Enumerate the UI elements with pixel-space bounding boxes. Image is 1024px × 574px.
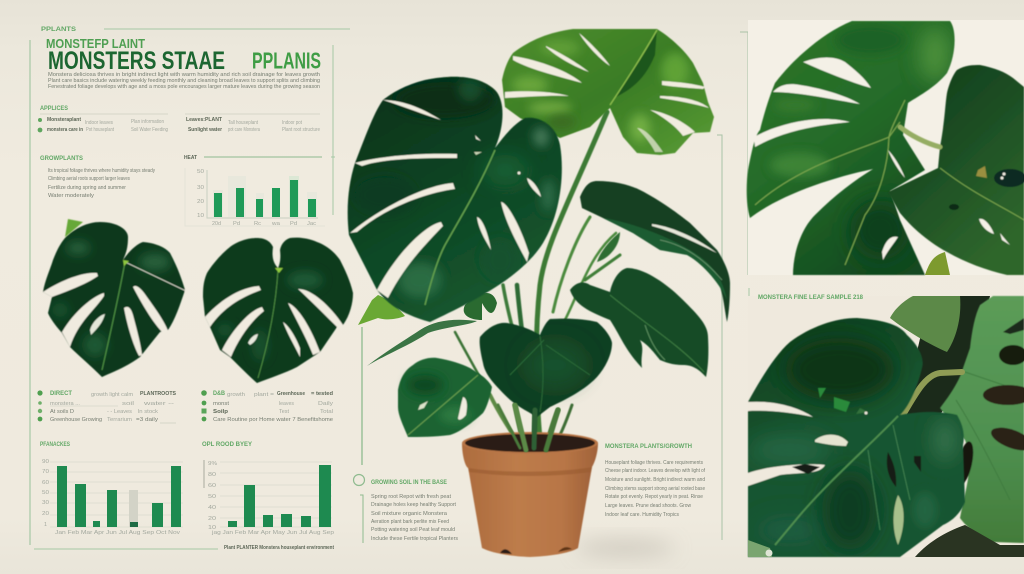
- section: applices: Indoor leaves: [85, 120, 113, 126]
- leaf: narrow lower-left: [367, 320, 477, 366]
- callout right: Rotate pot evenly. Repot yearly in peat. Rinse: [605, 494, 703, 500]
- leaf: lower right: [570, 268, 708, 377]
- plant: stems: [455, 112, 620, 450]
- left lower bar chart: [40, 442, 183, 536]
- left lower bar chart: 90: [42, 459, 49, 465]
- left legend list: [37, 390, 177, 423]
- section: applices: Monsteraplant: [47, 117, 81, 123]
- right lower bar chart: 10: [208, 525, 216, 531]
- pot shadow: [575, 540, 675, 556]
- callout right: [605, 444, 706, 518]
- callout left: Drainage holes keep healthy Support: [371, 502, 457, 508]
- intro paragraph: [48, 72, 320, 90]
- subtitle: MONSTEFP LAINT: [46, 37, 145, 51]
- leaf: lower left: [398, 358, 492, 437]
- title: MONSTERS STAAE: [48, 47, 225, 75]
- leaf: drooping right: [580, 181, 730, 322]
- right legend list: Soilp: [213, 409, 228, 415]
- small bar chart: 50: [197, 169, 204, 175]
- left lower bar chart: 30: [42, 500, 49, 506]
- left legend list: DIRECT: [50, 391, 72, 397]
- intro paragraph: Monstera deliciosa thrives in bright indirect light with warm humidity and rich soil drainage for leaves growth: [48, 72, 320, 78]
- left lower bar chart: PFANACKES: [40, 442, 70, 448]
- back leaf: [890, 296, 960, 352]
- small bar chart: 30: [197, 185, 204, 191]
- leaf: top light green: [502, 29, 714, 155]
- callout right: Large leaves. Prune dead shoots. Grow: [605, 503, 691, 509]
- small bar chart: HEAT: [184, 155, 197, 161]
- dark gap: [905, 296, 990, 415]
- right lower bar chart: 40: [208, 505, 216, 511]
- left legend list: water --: [142, 401, 174, 407]
- frame lines: [30, 29, 905, 549]
- left legend list: monstera ...: [50, 401, 80, 407]
- left legend list: Terrarium: [107, 417, 132, 423]
- left lower bar chart: 20: [42, 511, 49, 517]
- header label: PPLANTS: [41, 27, 76, 33]
- panel label: MONSTERA FINE LEAF SAMPLE 218: [758, 295, 864, 301]
- left lower bar chart: 1: [44, 522, 47, 528]
- section: applices: Plan information: [131, 119, 164, 125]
- small bar chart: 10: [197, 213, 204, 219]
- left lower bar chart: 70: [42, 469, 49, 475]
- small bar chart: [184, 155, 325, 227]
- leaf: central front: [480, 319, 612, 417]
- small bar chart: Pd: [233, 221, 240, 227]
- pot: [462, 432, 598, 557]
- small bar chart: Rc: [254, 221, 261, 227]
- callout left: Include these Fertile tropical Planters: [371, 536, 459, 542]
- section: applices: Plant root structure: [282, 127, 320, 133]
- section: applices: Tall houseplant: [228, 120, 258, 126]
- section: applices: Sunlight water: [188, 127, 222, 133]
- callout right: Indoor leaf care. Humidity Tropics: [605, 512, 679, 518]
- intro paragraph: Plant care basics include watering weekly feeding monthly and cleaning broad leaves to support splits and climbing: [48, 78, 320, 84]
- right legend list: [201, 390, 333, 423]
- small bar chart: wa: [271, 221, 281, 227]
- right leaf: [940, 296, 1024, 543]
- left legend list: PLANTROOTS: [140, 391, 177, 397]
- section: applices: Soil Water Feeding: [131, 127, 168, 133]
- callout right: Moisture and sunlight. Bright indirect warm and: [605, 477, 705, 483]
- left legend list: - - Leaves: [107, 409, 132, 415]
- small bar chart: 20d: [212, 221, 221, 227]
- right lower bar chart: jag Jan Feb Mar Apr May Jun Jul Aug Sep: [211, 530, 334, 536]
- bottom caption: Plant PLANTER Monstera houseplant environment: [224, 545, 334, 551]
- right lower bar chart: 80: [208, 472, 216, 478]
- panel: top right close-up: [747, 20, 1024, 275]
- panel: bottom right close-up: [748, 296, 1024, 557]
- right legend list: D&B: [213, 391, 226, 397]
- plant base stems over soil: [498, 405, 558, 450]
- section: growplants text: Its tropical foliage thrives where humidity stays steady: [48, 168, 155, 174]
- right lower bar chart: 9%: [208, 461, 217, 467]
- callout right: MONSTERA PLANTS/GROWTH: [605, 444, 692, 450]
- left leaf B: [203, 238, 353, 383]
- left lower bar chart: 50: [42, 490, 49, 496]
- right lower bar chart: 20: [208, 516, 216, 522]
- right lower bar chart: [202, 442, 334, 536]
- section: applices: [38, 106, 320, 133]
- section: growplants text: Climbing aerial roots support larger leaves: [48, 176, 130, 182]
- right lower bar chart: OPL ROOD BYEY: [202, 442, 252, 448]
- callout left: Spring root Repot with fresh peat: [371, 494, 452, 500]
- right legend list: Care Routine por Home water 7 Benefitshome: [213, 417, 333, 423]
- small bar chart: Pd: [290, 221, 297, 227]
- leaf: back lower: [464, 293, 497, 320]
- section: applices: Leaves:PLANT: [186, 117, 222, 123]
- section: growplants text: [40, 156, 155, 199]
- callout left: Potting watering soil Peat leaf mould: [371, 527, 455, 533]
- left legend list: ln stock: [138, 409, 158, 415]
- section: growplants text: GROWPLANTS: [40, 156, 83, 162]
- callout left: Soil mixture organic Monstera: [371, 511, 447, 517]
- section: growplants text: Fertilize during spring and summer: [48, 185, 126, 191]
- leaf: big dark main: [348, 77, 562, 322]
- intro paragraph: Fenestrated foliage develops with age and a moss pole encourages larger mature leaves during the growing season: [48, 84, 320, 90]
- section: applices: monstera care in: [47, 127, 83, 133]
- right legend list: = tested: [311, 391, 333, 397]
- right legend list: plant =: [254, 392, 274, 398]
- left legend list: Greenhouse Growing: [50, 417, 102, 423]
- close-up leaf front: [747, 21, 955, 275]
- left lower bar chart: Jan Feb Mar Apr Jun Jul Aug Sep Oct Nov: [55, 530, 180, 536]
- close-up leaf back: [888, 65, 1024, 275]
- right lower bar chart: 50: [208, 494, 216, 500]
- callout right: Cheese plant indoor. Leaves develop with light of: [605, 468, 706, 474]
- dark big leaf: [748, 318, 965, 557]
- section: applices: Pot houseplant: [86, 127, 114, 133]
- small bar chart: 20: [197, 199, 204, 205]
- right legend list: Greenhouse: [277, 391, 305, 397]
- left legend list: At soils D: [50, 409, 74, 415]
- section: applices: Indoor pot: [282, 120, 302, 126]
- callout left: Aeration plant bark perlite mix Feed: [371, 519, 449, 525]
- section: growplants text: Water moderately: [48, 193, 95, 199]
- right legend list: leaves: [279, 401, 294, 407]
- callout left: GROWING SOIL IN THE BASE: [371, 480, 447, 486]
- right legend list: Daily: [318, 401, 333, 407]
- right legend list: Test: [279, 409, 289, 415]
- left leaf A: [43, 219, 186, 377]
- callout left: [354, 474, 459, 542]
- leaf: small light green: [358, 295, 405, 325]
- right legend list: Total: [320, 409, 333, 415]
- small bar chart: Jac: [307, 221, 316, 227]
- right legend list: monst: [213, 401, 230, 407]
- left lower bar chart: 60: [42, 480, 49, 486]
- left legend list: growth light calm: [91, 392, 133, 398]
- section: applices: pot care Monstera: [228, 127, 261, 133]
- right lower bar chart: 60: [208, 483, 216, 489]
- left legend list: soil: [122, 401, 134, 407]
- title accent: PPLANIS: [252, 48, 321, 74]
- callout right: Houseplant foliage thrives. Care requirements: [605, 460, 703, 466]
- right legend list: growth: [227, 392, 245, 398]
- stem: [903, 372, 962, 415]
- callout right: Climbing stems support strong aerial rooted base: [605, 486, 705, 492]
- section: applices: APPLICES: [40, 106, 68, 112]
- left legend list: =3 daily: [136, 417, 159, 423]
